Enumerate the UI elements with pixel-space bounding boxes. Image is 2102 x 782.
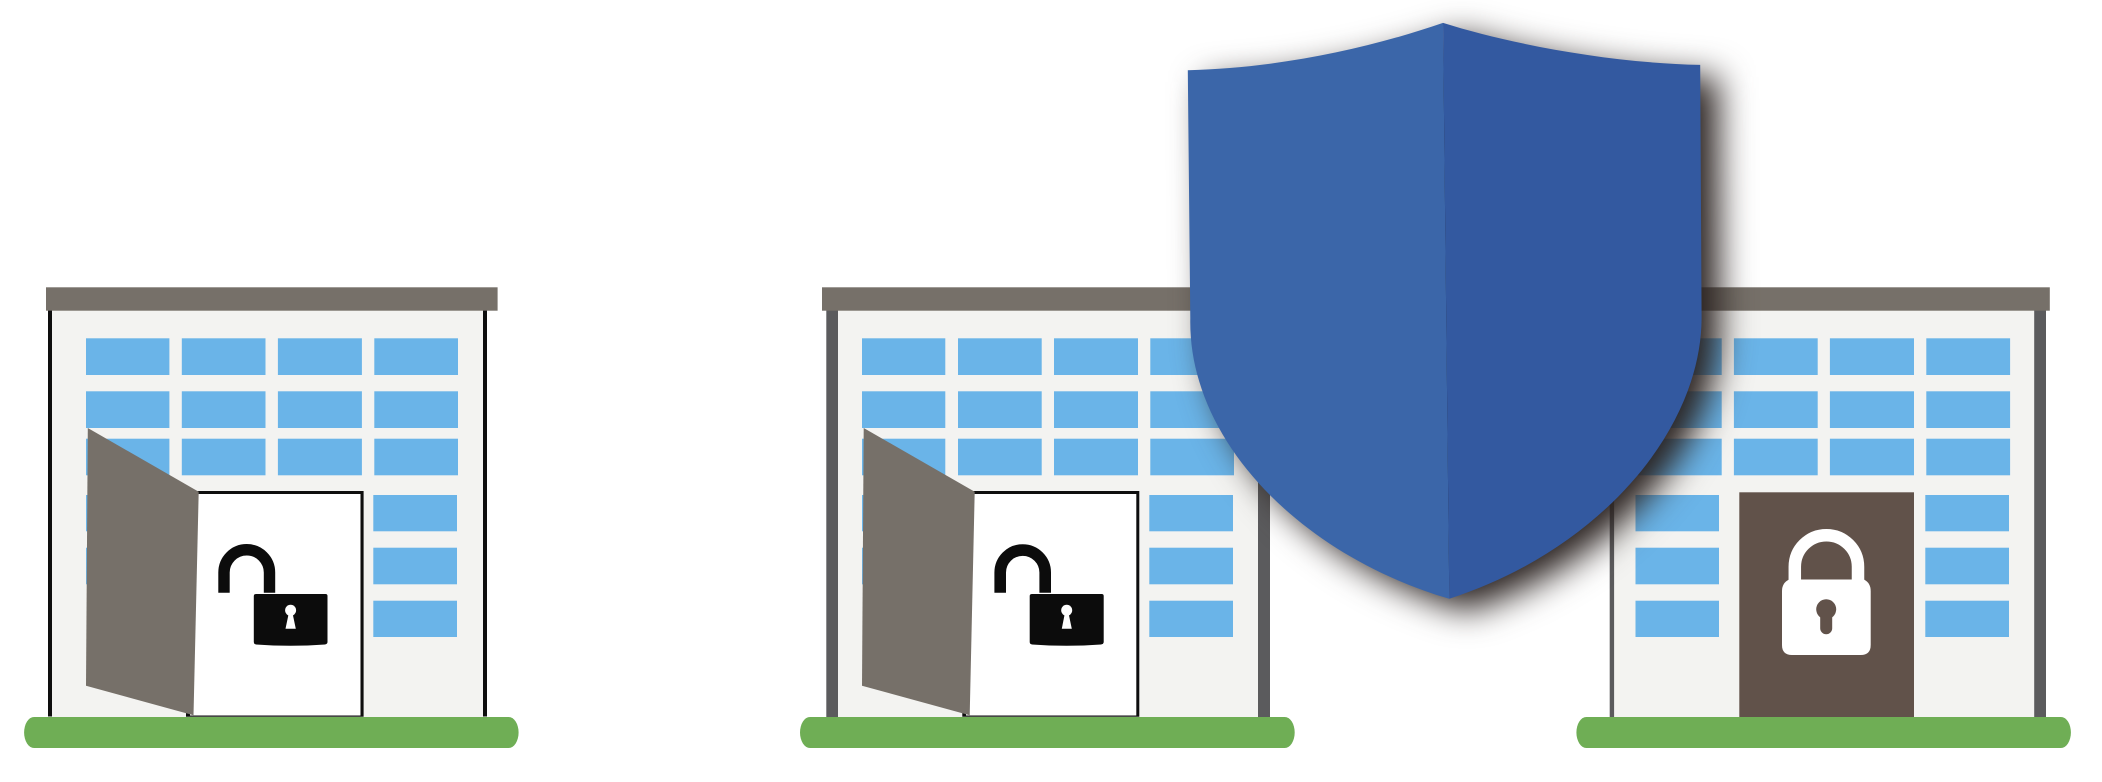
icon: open padlock 1 — [224, 550, 328, 646]
building 3 roof — [1598, 287, 2050, 311]
shield right half — [1443, 23, 1702, 599]
building 2 open door leaf — [862, 428, 975, 715]
building 2 ground — [800, 717, 1295, 748]
icon: open padlock 2 — [1000, 550, 1104, 646]
icon: closed padlock — [1782, 535, 1871, 655]
shield — [1188, 23, 1720, 611]
building 1 wall — [50, 310, 485, 717]
building 2: unlocked, open door — [800, 287, 1295, 748]
building 1 roof — [46, 287, 498, 311]
building 1 open door leaf — [86, 428, 199, 715]
building 2 roof — [822, 287, 1273, 311]
building 3 closed door — [1739, 492, 1914, 717]
building 3 ground — [1576, 717, 2071, 748]
building 2 wall — [838, 310, 1258, 717]
shield shadow — [1206, 35, 1720, 611]
building 3 side pillars — [1610, 309, 2046, 717]
building 1 side edges — [48, 309, 487, 716]
building 2 side pillars — [826, 309, 1270, 717]
building 1 ground — [24, 717, 519, 748]
building 3 wall — [1614, 310, 2034, 717]
building 1 windows — [86, 338, 458, 637]
building 1 doorway — [186, 491, 364, 717]
building 3: locked, closed door — [1576, 287, 2071, 748]
building 2 windows — [862, 338, 1234, 637]
building 1: unlocked, open door — [24, 287, 519, 748]
shield left half — [1188, 23, 1449, 599]
building 3 windows — [1636, 338, 2010, 637]
building 2 doorway — [962, 491, 1139, 717]
